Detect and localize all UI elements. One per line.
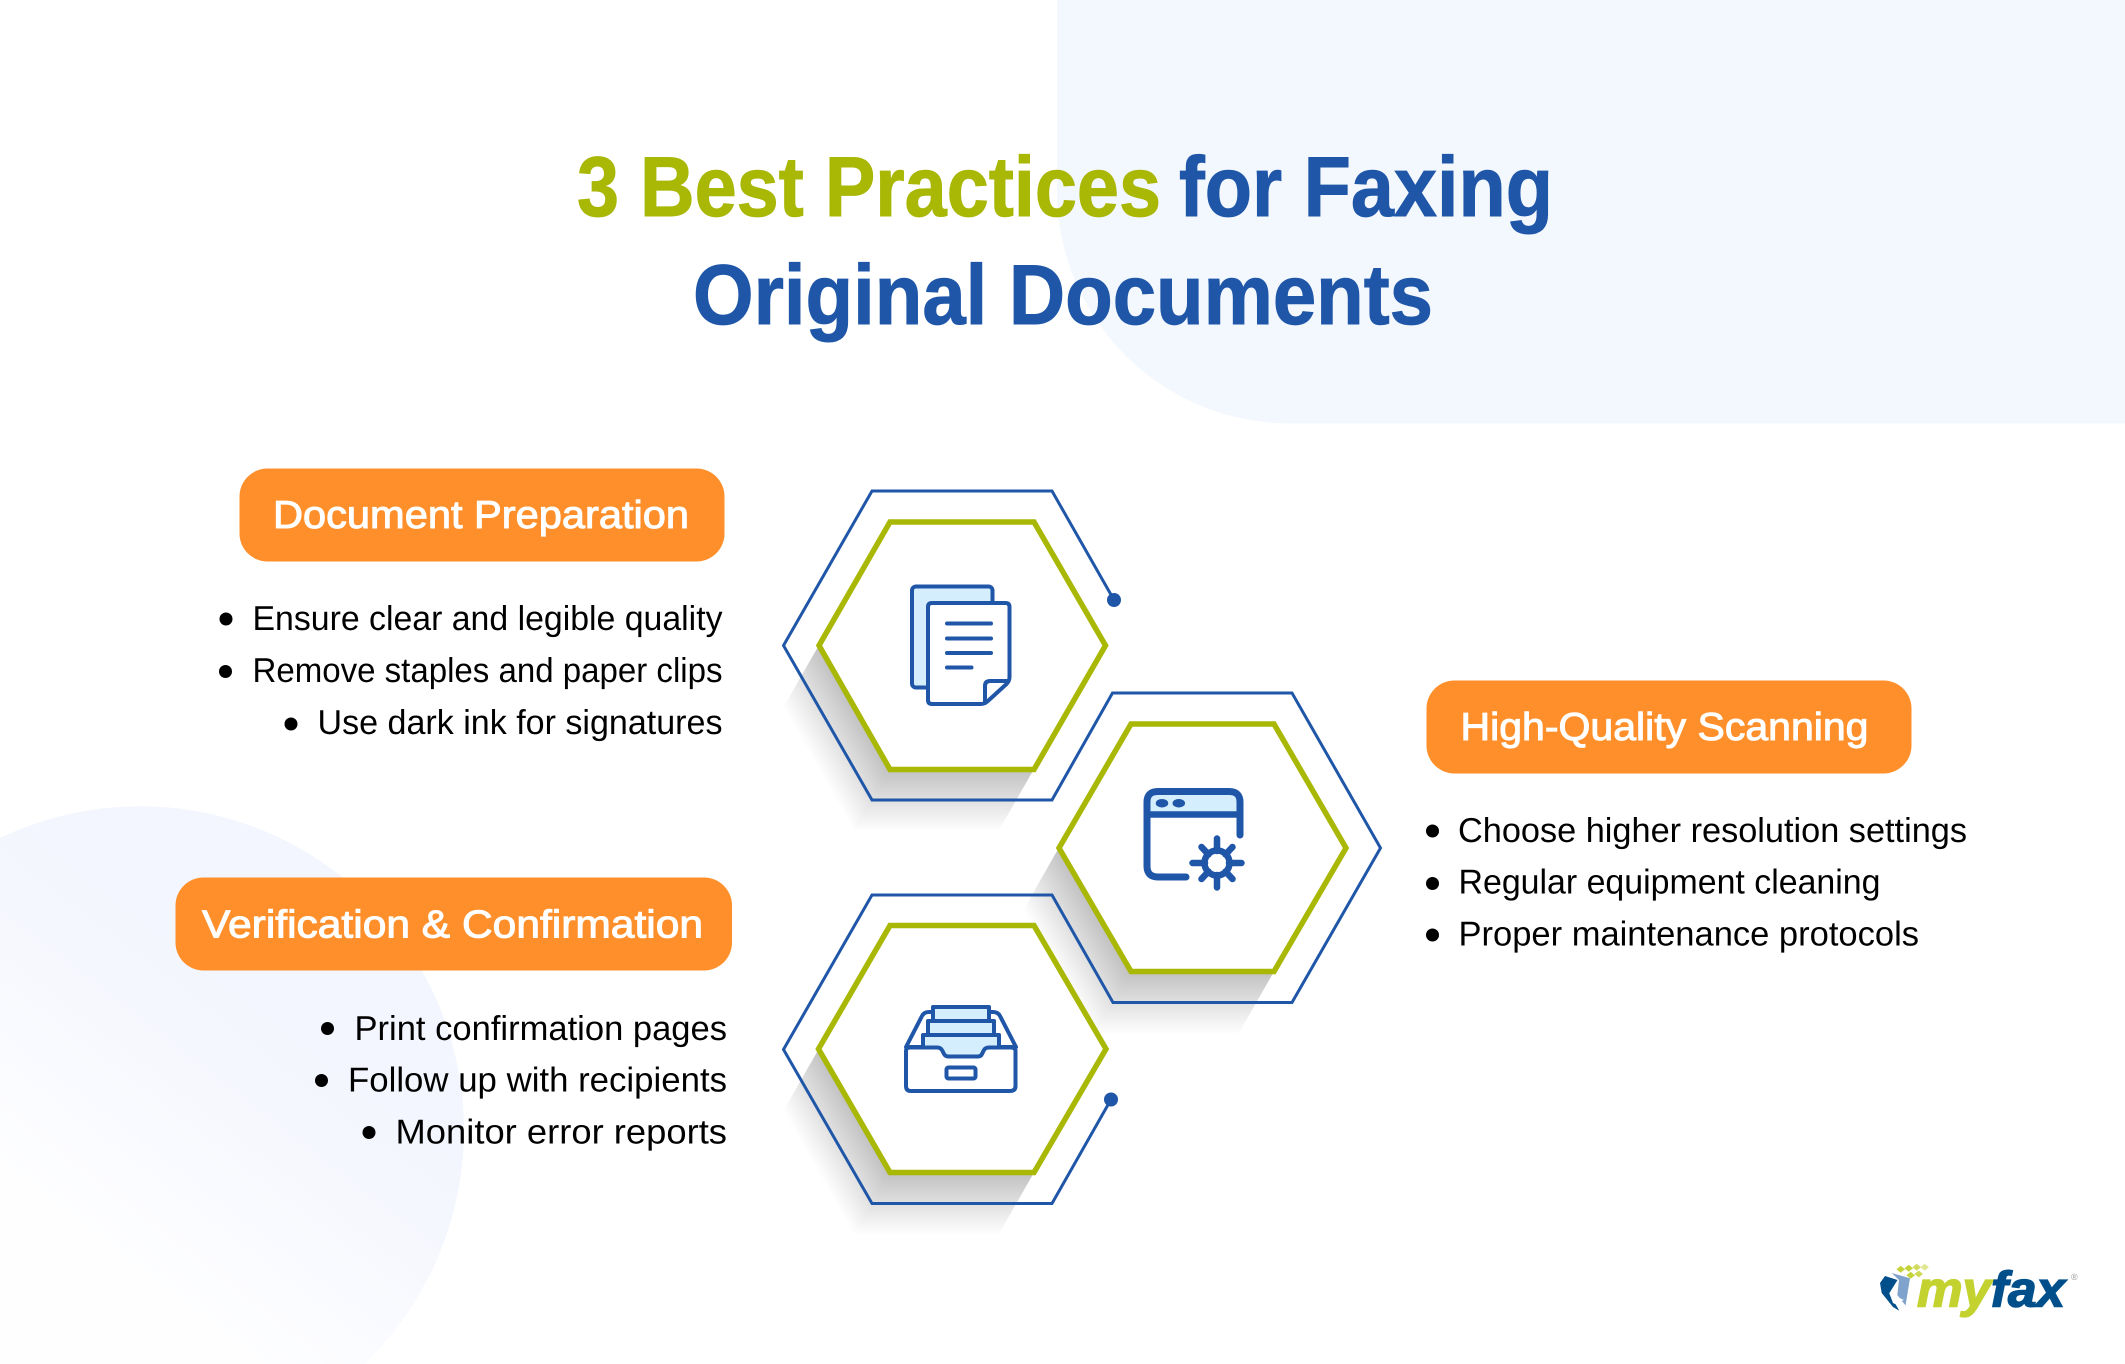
bullet list: document preparation: Use dark ink for signatures bbox=[318, 704, 722, 742]
title bbox=[577, 140, 1553, 343]
heading pill: document preparation bbox=[240, 468, 724, 562]
bullet list: high-quality scanning bbox=[1426, 812, 1967, 954]
logo mark bbox=[1880, 1264, 1929, 1311]
bullet list: high-quality scanning: Choose higher resolution settings bbox=[1458, 812, 1967, 850]
connecting outline through three hexagons bbox=[784, 491, 1380, 1204]
bullet list: document preparation: Remove staples and paper clips bbox=[252, 652, 722, 690]
outline end dot: top bbox=[1107, 593, 1121, 607]
bullet list: document preparation bbox=[219, 600, 723, 742]
logo wordmark: my bbox=[1917, 1262, 1993, 1318]
heading pill: verification and confirmation: Verification & Confirmation bbox=[202, 904, 703, 946]
heading pill: verification and confirmation bbox=[176, 878, 732, 970]
heading pill: high-quality scanning bbox=[1426, 680, 1912, 774]
icon: file tray bbox=[906, 1007, 1016, 1091]
background shape: top right panel bbox=[1057, 0, 2125, 424]
title: 3 Best Practices bbox=[577, 140, 1161, 235]
panel: verification and confirmation bbox=[176, 878, 732, 1152]
icon: documents bbox=[912, 586, 1010, 704]
inner hexagon: bottom bbox=[818, 926, 1106, 1172]
hexagon shadow: right bbox=[1023, 848, 1274, 1034]
panel: high-quality scanning bbox=[1426, 680, 1967, 954]
heading pill: document preparation: Document Preparation bbox=[273, 494, 689, 537]
heading pill: high-quality scanning: High-Quality Scanning bbox=[1460, 706, 1868, 749]
logo: myfax bbox=[1880, 1262, 2078, 1318]
title: Original Documents bbox=[693, 248, 1433, 343]
logo wordmark bbox=[1917, 1262, 2067, 1318]
panel: document preparation bbox=[219, 468, 724, 742]
bullet list: document preparation: Ensure clear and legible quality bbox=[252, 600, 723, 638]
bullet list: verification and confirmation: Follow up with recipients bbox=[348, 1062, 727, 1100]
inner hexagon: right bbox=[1059, 724, 1346, 972]
title: for Faxing bbox=[1179, 140, 1553, 235]
hexagon diagram bbox=[783, 491, 1380, 1236]
hexagon shadow: bottom bbox=[783, 1048, 1034, 1236]
bullet list: high-quality scanning: Proper maintenance protocols bbox=[1458, 916, 1919, 954]
hexagon shadow: top bbox=[783, 645, 1034, 832]
bullet list: verification and confirmation: Print confirmation pages bbox=[354, 1010, 727, 1048]
bullet list: verification and confirmation bbox=[315, 1010, 727, 1152]
logo wordmark: fax bbox=[1991, 1262, 2067, 1318]
bullet list: verification and confirmation: Monitor error reports bbox=[396, 1114, 727, 1152]
outline end dot: bottom bbox=[1104, 1092, 1118, 1106]
background shape: bottom left circle bbox=[0, 806, 464, 1364]
icon: browser window with gear bbox=[1147, 792, 1242, 888]
bullet list: high-quality scanning: Regular equipment cleaning bbox=[1458, 864, 1880, 902]
registered mark: ® bbox=[2071, 1272, 2078, 1282]
inner hexagon: top bbox=[819, 522, 1106, 770]
